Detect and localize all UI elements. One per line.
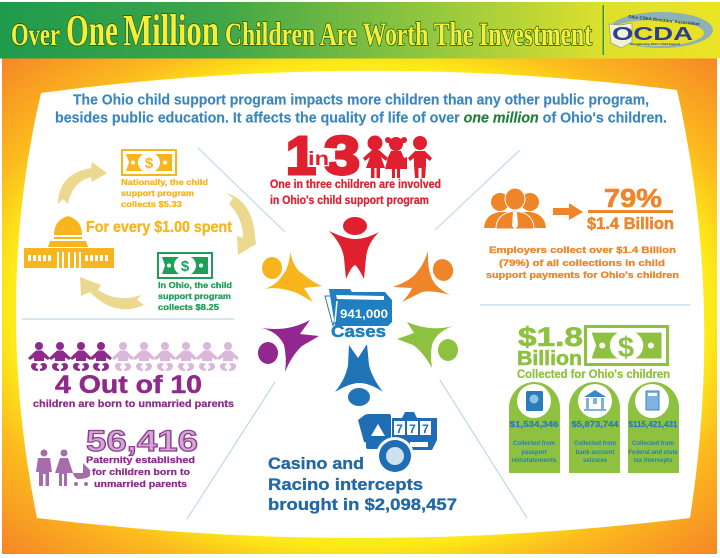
panel: 1.8 billion collected [509,322,679,473]
one in three text [270,179,441,207]
OCDA logo: OCDA [612,24,693,44]
card: tax intercepts [628,382,679,473]
title [11,6,592,55]
cases label: Cases [331,322,386,341]
icon: three children [363,136,432,178]
card: tax intercepts: $115,421,431 [628,420,678,429]
arrow [553,203,583,220]
national text [121,177,208,209]
card: bank: Collected from [574,441,616,447]
card: bank: $5,873,744 [572,420,619,429]
card: passport [509,382,560,473]
icon: capitol [24,216,114,268]
1 in 3 numeral [286,126,360,186]
national text: support program [121,188,194,198]
OCDA logo [606,12,713,48]
panel: central figures and cases [258,217,458,406]
figure: blue [335,344,383,406]
1 in 3 numeral: in [308,149,329,170]
one in three text: One in three children are involved [270,179,441,191]
icon: cards, slots and chip: 7 [422,422,429,436]
national text: collects $5.33 [121,199,182,209]
title: One [66,6,118,55]
panel: one in three [270,126,441,207]
title: Over [11,16,60,52]
Ohio text: support program [158,291,231,301]
figure: orange [393,251,456,302]
employers text: support payments for Ohio's children [486,270,679,281]
paternity text: for children born to [92,467,190,478]
casino text: Casino and [268,454,364,473]
1.8 billion heading: $1.8 [518,322,583,352]
panel: return on investment: $ [145,155,154,172]
1 in 3 numeral: 3 [324,126,360,186]
card: passport: $1,534,346 [510,420,559,429]
intro text [55,92,667,126]
OCDA logo: Strengthening Ohio's Child Support [630,42,680,46]
collected label: Collected for Ohio's children [517,369,670,381]
card: passport: passport [521,450,547,456]
card: tax intercepts: Federal and state [628,450,678,456]
1.8 billion heading [517,322,583,370]
card: bank: bank account [576,450,614,456]
1.8 billion heading: Billion [517,348,582,370]
intro text: The Ohio child support program impacts more children than any other public program, [73,92,649,108]
card: tax intercepts: Collected from [632,441,674,447]
Ohio text: collects $8.25 [158,302,219,312]
icon: large bill [586,327,668,365]
intro text: besides public education. It affects the quality of life of over one million of Ohio's children. [55,110,667,126]
icon: folder: 941,000 [340,307,388,321]
cycle arrows [58,162,256,309]
casino text: brought in $2,098,457 [268,495,457,514]
icon: national bill [122,150,176,175]
panel: employers [484,183,679,281]
79 percent: 79% [604,183,662,213]
Ohio text: In Ohio, the child [158,280,232,290]
icon row: ten babies [28,342,239,371]
card: tax intercepts: tax intercepts [633,458,673,464]
figure: red [329,217,379,279]
unmarried label: children are born to unmarried parents [33,398,234,410]
panel: casino intercepts [268,412,457,514]
icon: cards, slots and chip: 7 [396,422,403,436]
card: passport: reinstatements [512,458,557,464]
panel: return on investment [24,150,256,312]
figure: yellow [262,251,322,302]
56,416: 56,416 [86,425,198,458]
icon: Ohio bill [158,253,212,278]
casino text: Racino intercepts [268,475,423,494]
card: passport: Collected from [513,441,555,447]
employers text [486,245,679,281]
panel: return on investment: $ [181,258,190,275]
Ohio text [158,280,232,312]
icon: folder [325,289,392,326]
panel: unmarried parents [28,342,239,490]
paternity text [86,455,195,490]
4 out of 10: 4 Out of 10 [55,371,202,399]
paternity text: Paternity established [86,455,195,466]
1 in 3 numeral: 1 [286,126,316,186]
card: bank [569,382,620,473]
1.4 billion: $1.4 Billion [587,214,674,233]
title banner [0,2,720,58]
national text: Nationally, the child [121,177,208,187]
employers text: (79%) of all collections in child [499,258,665,269]
figure: green [397,322,458,368]
OCDA logo: Ohio CSEA Directors' Association [628,14,700,27]
banner divider [602,5,604,55]
icon: family [36,450,90,486]
icon: employers [484,188,546,229]
paternity text: unmarried parents [94,479,187,490]
icon: cards, slots and chip [358,412,437,475]
one in three text: in Ohio's child support program [270,195,429,207]
icon: large bill: $ [618,332,634,364]
casino text [268,454,457,514]
figure: purple [258,320,319,372]
title: Million [123,6,219,55]
card: bank: seizures [583,458,608,464]
employers text: Employers collect over $1.4 Billion [489,245,676,256]
icon: cards, slots and chip: 7 [409,422,416,436]
for every dollar: For every $1.00 spent [86,219,232,236]
